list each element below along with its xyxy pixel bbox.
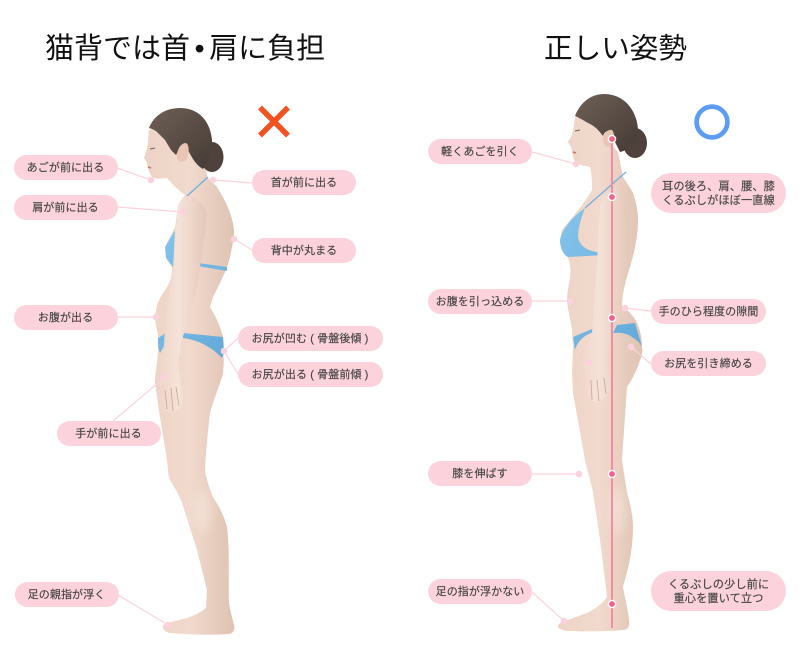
callout: [238, 326, 382, 351]
callout: 足の指が浮かない: [436, 586, 524, 598]
callout: お尻が出る ( 骨盤前傾 ): [252, 369, 368, 381]
callout: [651, 571, 786, 611]
callout: [428, 579, 532, 604]
callout: [14, 305, 118, 330]
halter strap: [187, 177, 208, 196]
ear: [603, 130, 614, 147]
calf highlight: [609, 486, 625, 534]
callout: お尻を引き締める: [664, 358, 753, 370]
body: [558, 117, 642, 631]
callout: [651, 351, 766, 376]
bun: [623, 128, 647, 158]
icon: circle: [697, 107, 727, 137]
title: bad posture: 猫背では首•肩に負担: [45, 33, 325, 65]
callout: 重心を置いて立つ: [674, 592, 763, 604]
callout: [428, 461, 532, 486]
callout: くるぶしがほぼ一直線: [662, 194, 775, 206]
hair: [575, 94, 638, 152]
figure: correct posture: [558, 94, 647, 631]
callout: [651, 173, 786, 213]
face features: [575, 130, 580, 131]
callout: [252, 170, 356, 195]
callout: [14, 155, 118, 180]
fingers: [165, 387, 179, 411]
callout: あごが前に出る: [27, 162, 104, 174]
callout: 手のひら程度の隙間: [659, 306, 758, 318]
hair: [149, 108, 212, 169]
alignment line: [608, 135, 616, 628]
callout: [14, 582, 118, 607]
callout: 足の親指が浮く: [28, 589, 105, 601]
bikini: [560, 208, 642, 350]
callout: お尻が凹む ( 骨盤後傾 ): [252, 333, 368, 345]
callout: [252, 238, 356, 263]
body: [144, 125, 234, 635]
callout: お腹が出る: [38, 312, 93, 324]
arm: [573, 187, 630, 403]
callout: [56, 421, 160, 446]
callout: 背中が丸まる: [271, 245, 337, 257]
callout: くるぶしの少し前に: [668, 578, 769, 590]
figure: rounded-back posture: [144, 108, 234, 635]
callout: 膝を伸ばす: [452, 468, 508, 480]
callout: 手が前に出る: [75, 428, 142, 440]
callout: [238, 362, 382, 387]
ear: [177, 143, 189, 162]
halter strap: [585, 172, 626, 208]
callout: [428, 139, 532, 164]
bun: [200, 142, 224, 172]
callout: 耳の後ろ、肩、腰、膝: [662, 180, 775, 192]
calf highlight: [195, 488, 211, 532]
bikini: [158, 227, 227, 358]
callout: 首が前に出る: [271, 177, 337, 189]
callout: [428, 289, 532, 314]
callout: 軽くあごを引く: [441, 146, 519, 158]
leader lines: left: [113, 168, 252, 628]
arm: [156, 196, 207, 413]
callout: お腹を引っ込める: [436, 296, 524, 308]
leader lines: right: [532, 152, 651, 624]
title: good posture: 正しい姿勢: [544, 33, 687, 65]
icon: cross: [260, 108, 288, 136]
face features: [150, 148, 155, 149]
callout: [651, 299, 766, 324]
callout: [14, 195, 118, 220]
fingers: [591, 378, 606, 401]
callout: 肩が前に出る: [32, 202, 99, 214]
